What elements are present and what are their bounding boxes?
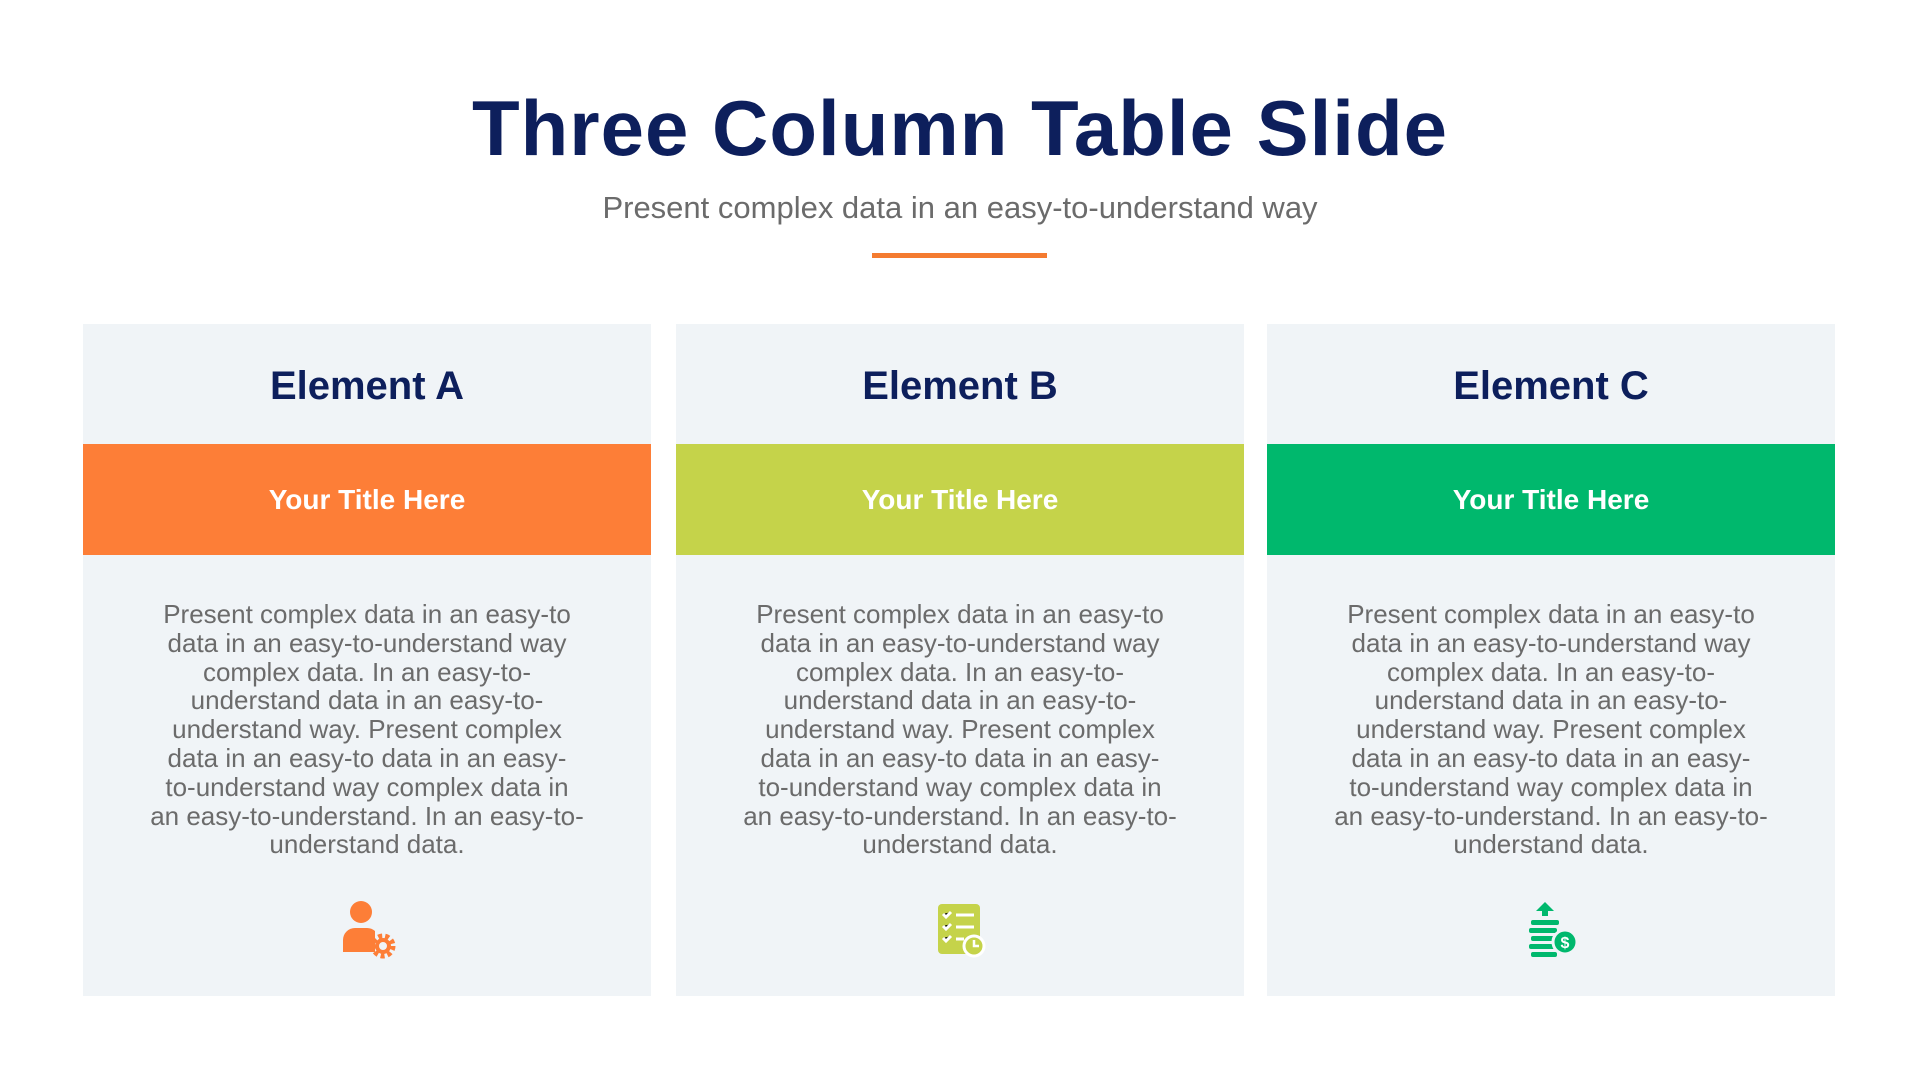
body text A: understand data. — [269, 829, 465, 859]
body text C: understand data in an easy-to- — [1375, 685, 1727, 715]
body text C: an easy-to-understand. In an easy-to- — [1334, 801, 1768, 831]
title: Three Column Table Slide — [472, 84, 1448, 172]
body text B: Present complex data in an easy-to — [756, 599, 1164, 629]
body text C: understand way. Present complex — [1356, 714, 1746, 744]
icon: checklist clock — [938, 904, 986, 958]
panel: element C — [1267, 324, 1835, 996]
body text A: data in an easy-to-understand way — [168, 628, 566, 658]
icon: user gear — [343, 901, 396, 958]
body text C: understand data. — [1453, 829, 1649, 859]
band C: Your Title Here — [1453, 484, 1649, 515]
body text C: Present complex data in an easy-to — [1347, 599, 1755, 629]
body text A — [150, 599, 584, 859]
heading C: Element C — [1453, 364, 1649, 408]
band B: Your Title Here — [862, 484, 1058, 515]
body text B: data in an easy-to-understand way — [761, 628, 1159, 658]
body text A: understand way. Present complex — [172, 714, 562, 744]
body text C: to-understand way complex data in — [1349, 772, 1753, 802]
band A — [83, 444, 651, 555]
band C — [1267, 444, 1835, 555]
body text B: understand data. — [862, 829, 1058, 859]
subtitle: Present complex data in an easy-to-understand way — [602, 190, 1318, 225]
body text B: complex data. In an easy-to- — [796, 657, 1124, 687]
body text B: an easy-to-understand. In an easy-to- — [743, 801, 1177, 831]
accent underline — [872, 253, 1047, 258]
body text A: data in an easy-to data in an easy- — [168, 743, 566, 773]
band B — [676, 444, 1244, 555]
body text B: understand way. Present complex — [765, 714, 1155, 744]
icon: coins stack dollar: $ — [1561, 935, 1570, 952]
body text B: data in an easy-to data in an easy- — [761, 743, 1159, 773]
body text A: understand data in an easy-to- — [191, 685, 543, 715]
icon: coins stack dollar — [1529, 902, 1576, 957]
body text B: to-understand way complex data in — [758, 772, 1162, 802]
body text A: an easy-to-understand. In an easy-to- — [150, 801, 584, 831]
panel: element B — [676, 324, 1244, 996]
body text C: complex data. In an easy-to- — [1387, 657, 1715, 687]
body text C: data in an easy-to data in an easy- — [1352, 743, 1750, 773]
panel: element A — [83, 324, 651, 996]
body text A: to-understand way complex data in — [165, 772, 569, 802]
heading B: Element B — [862, 364, 1058, 408]
heading A: Element A — [270, 364, 464, 408]
body text B — [743, 599, 1177, 859]
body text C — [1334, 599, 1768, 859]
body text B: understand data in an easy-to- — [784, 685, 1136, 715]
body text C: data in an easy-to-understand way — [1352, 628, 1750, 658]
body text A: complex data. In an easy-to- — [203, 657, 531, 687]
body text A: Present complex data in an easy-to — [163, 599, 571, 629]
band A: Your Title Here — [269, 484, 465, 515]
